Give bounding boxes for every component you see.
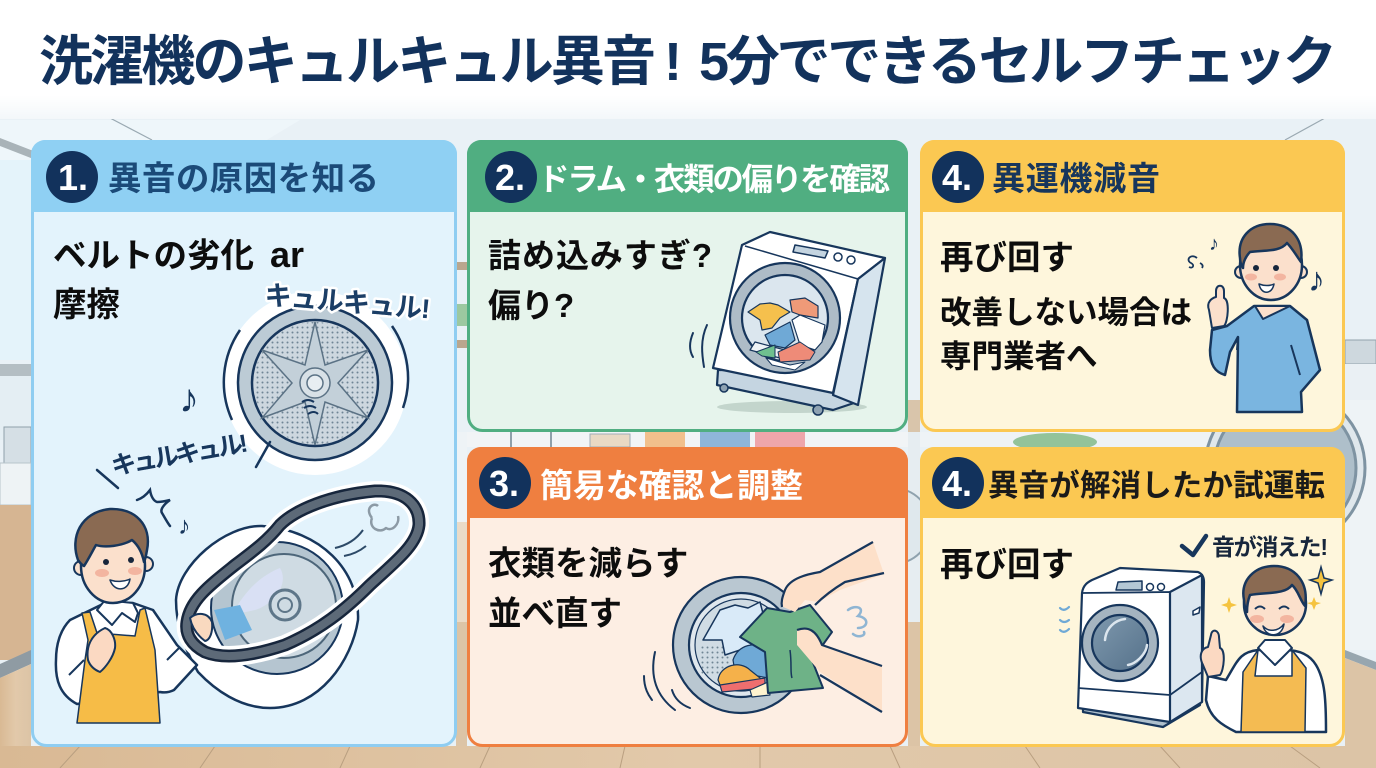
panel 4: abnormal noise reduction (920, 140, 1345, 430)
heading 2: ドラム・衣類の偏りを確認 (538, 161, 890, 197)
motion marks drum (644, 652, 690, 710)
heading 4: 異運機減音 (992, 160, 1160, 197)
title: ! (664, 32, 682, 92)
body text 4 second: 再び回す (940, 547, 1074, 584)
music notes: ♪ (1308, 261, 1325, 299)
body text 3: 衣類を減らす (488, 546, 688, 583)
step badge 1 (46, 151, 98, 203)
step badge 4 second (932, 457, 984, 509)
step badge 2 (485, 151, 537, 203)
panel 4 second: test run (920, 447, 1345, 746)
caption: sound gone: 音が消えた! (1212, 534, 1328, 560)
heading 4 second: 異音が解消したか試運転 (988, 468, 1325, 503)
vibration marks washer (690, 325, 707, 367)
panel 2: drum and clothes balance (467, 140, 908, 430)
sound label lower: キュルキュル! (109, 429, 250, 481)
body text 1 (53, 234, 304, 324)
body text 4: 専門業者へ (940, 338, 1098, 374)
illustration: happy technician (1201, 566, 1326, 732)
illustration: worn belt (187, 491, 419, 656)
sparkles (1221, 567, 1332, 613)
illustration: washer front (1078, 568, 1204, 727)
step badge 3 (479, 457, 531, 509)
step badge 3: 3. (489, 463, 519, 504)
body text 2 (488, 237, 712, 324)
body text 4: 再び回す (940, 240, 1074, 277)
illustration: washer opening (176, 526, 358, 708)
body text 2: 詰め込みすぎ? (488, 237, 712, 274)
heading 3: 簡易な確認と調整 (540, 467, 803, 504)
body text 3: 並べ直す (488, 596, 622, 633)
illustration: tilted washer (713, 232, 885, 415)
body text 1: ar (270, 234, 304, 275)
illustration: thumbs up person (1208, 224, 1320, 412)
music notes (1189, 233, 1325, 299)
body text 2: 偏り? (488, 287, 574, 324)
sound label top: キュルキュル! (263, 280, 431, 324)
music note: ♪ (179, 377, 199, 421)
panel 3: simple check and adjustment (467, 447, 908, 746)
heading 1: 異音の原因を知る (108, 161, 379, 198)
step badge 4 second: 4. (942, 463, 972, 504)
title: 洗濯機のキュルキュル異音 (39, 32, 656, 92)
illustration: drum with clothes and hands (673, 542, 884, 713)
body text 4 (940, 240, 1192, 374)
title banner (0, 0, 1376, 119)
body text 3 (488, 546, 688, 633)
panel 1: causes (31, 140, 457, 746)
small note: ♪ (178, 512, 190, 540)
title: 5分でできるセルフチェック (699, 32, 1337, 92)
body text 1: ベルトの劣化 (53, 238, 254, 275)
sound marks (97, 442, 270, 526)
illustration: drum with spokes (223, 291, 408, 475)
check mark (1182, 536, 1206, 555)
music notes: ♪ (1209, 233, 1219, 255)
step badge 4 (932, 151, 984, 203)
step badge 4: 4. (942, 157, 972, 198)
illustration: technician (56, 509, 197, 723)
step badge 2: 2. (495, 157, 525, 198)
title (39, 32, 1337, 92)
air swirl (848, 607, 866, 636)
body text 1: 摩擦 (53, 287, 120, 324)
vibration marks (1060, 607, 1069, 632)
step badge 1: 1. (58, 157, 88, 198)
body text 4: 改善しない場合は (940, 294, 1192, 330)
